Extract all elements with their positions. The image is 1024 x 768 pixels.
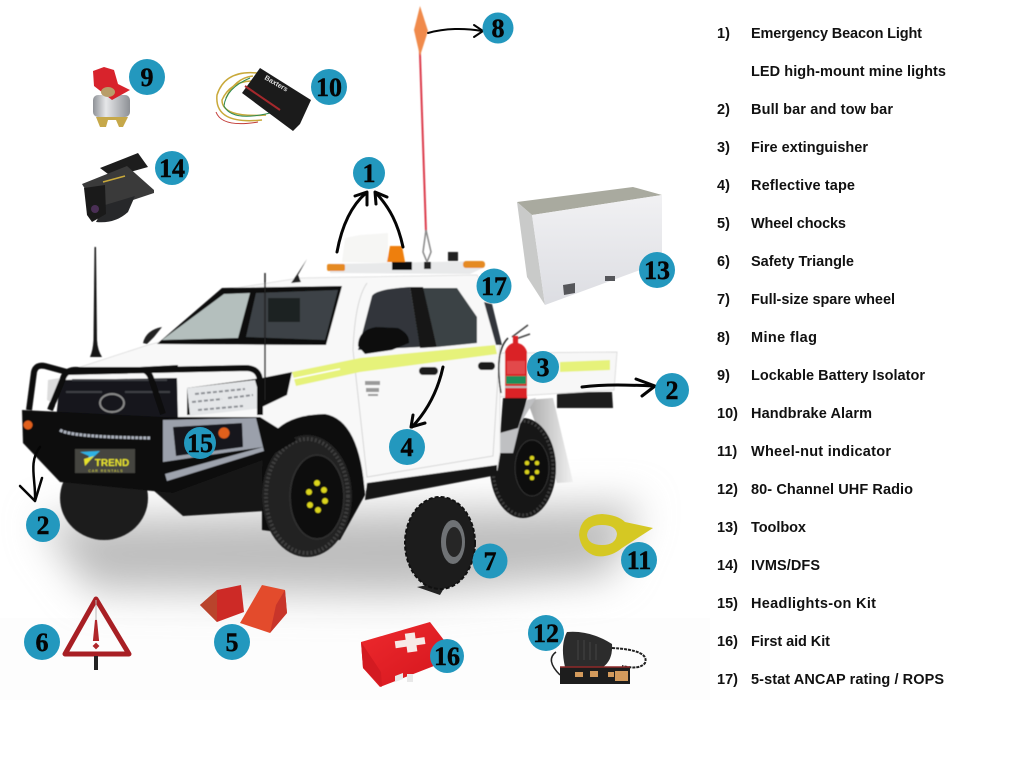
badge 13 [639,252,675,288]
equipment legend list: 2) [717,102,730,118]
light pod [173,423,243,456]
badge 14: 14 [159,154,185,183]
badge 9: 9 [140,63,154,92]
badge 8: 8 [492,14,504,43]
equipment legend list: 11) [717,444,737,460]
equipment legend list: Emergency Beacon Light [751,26,922,42]
equipment legend list: 6) [717,254,730,270]
badge 8 [482,12,514,44]
equipment legend list: 8) [717,330,730,346]
equipment legend list: Safety Triangle [751,254,854,270]
bull bar tubes [29,366,260,415]
equipment legend list: 5) [717,216,730,232]
equipment legend list: Toolbox [751,520,806,536]
grille [47,378,178,420]
equipment legend list: 80- Channel UHF Radio [751,482,913,498]
badge 6 [24,624,60,660]
underbody [130,450,280,516]
equipment legend list: Wheel-nut indicator [751,444,891,460]
badge 5: 5 [226,628,238,657]
equipment legend list: 17) [717,672,738,688]
equipment legend list: First aid Kit [751,634,830,650]
equipment legend list: 12) [717,482,738,498]
equipment legend list: Bull bar and tow bar [751,102,893,118]
front wheel [262,435,352,557]
badge 2, rear: 2 [666,376,678,405]
badge 1: 1 [362,159,376,188]
first aid kit [361,622,457,687]
hood aerial [90,247,102,357]
badge 17: 17 [481,272,507,301]
equipment legend list: 10) [717,406,738,422]
vehicle: white ute with bull bar [22,6,617,557]
arrow to 1, right [375,192,403,247]
equipment legend list: 15) [717,596,738,612]
equipment legend list: LED high-mount mine lights [751,64,946,80]
badge 11 [621,542,657,578]
arrow to 2, front [20,447,42,501]
rear cab glass [484,302,502,345]
door seams [353,283,500,477]
toolbox [517,187,662,305]
equipment legend list: Wheel chocks [751,216,846,232]
side sticker [365,381,380,396]
equipment legend list: 14) [717,558,738,574]
roof rack [330,261,483,274]
bumper [22,410,297,493]
rear fender [495,398,536,453]
IVMS dash camera [82,153,154,222]
badge 2, rear [655,373,689,407]
equipment legend list: IVMS/DFS [751,558,820,574]
badge 16: 16 [434,642,460,671]
handbrake alarm: Baxters [263,75,289,94]
badge 10 [311,69,347,105]
windscreen [157,286,342,345]
badge 11: 11 [627,546,651,575]
UHF radio [551,632,646,684]
equipment legend list: 9) [717,368,730,384]
wheel chocks [200,585,287,633]
badge 3 [527,351,559,383]
logo plate [75,449,135,473]
equipment legend list: 7) [717,292,730,308]
equipment legend list: Headlights-on Kit [751,596,876,612]
equipment legend list: 16) [717,634,738,650]
badge 2, front: 2 [36,511,50,540]
badge 15: 15 [187,429,213,458]
door handles [419,362,495,375]
equipment legend list: 4) [717,178,730,194]
handbrake alarm [216,68,311,131]
equipment legend list: Fire extinguisher [751,140,868,156]
arrow to 1, left [337,192,367,252]
bumper silver panel [163,418,263,462]
badge 16 [430,639,464,673]
badge 4: 4 [400,433,414,462]
badge 6: 6 [36,628,48,657]
wheel arch [262,414,365,540]
badge 7 [472,544,508,578]
badge 1 [353,157,385,189]
headlight [187,372,292,416]
fascia aerial [264,273,266,400]
badge 3: 3 [536,353,550,382]
side step [365,465,497,500]
rear door window [423,288,477,347]
roof aerial [291,259,307,283]
left mirror [143,327,162,344]
equipment legend list: 5-stat ANCAP rating / ROPS [751,672,944,688]
badge 2, front [26,508,60,542]
badge 9 [129,59,165,95]
equipment legend list: Reflective tape [751,178,855,194]
badge 5 [214,624,250,660]
amber marker lights [327,261,485,271]
equipment legend list: 13) [717,520,738,536]
LED light bar [60,430,150,438]
equipment legend list: 1) [717,26,730,42]
arrow to 8 [428,25,483,37]
wing mirror on door [358,327,409,354]
wheel-nut indicator [579,514,653,556]
badge 4 [389,429,425,465]
front door window [358,287,420,350]
rear tray [500,352,617,483]
spare wheel [405,497,475,595]
equipment legend list: Full-size spare wheel [751,292,895,308]
body shell [60,275,500,490]
mine flag [414,6,428,56]
reflective tape on cab [292,345,497,386]
badge 10: 10 [316,73,342,102]
front-left tyre [60,456,148,540]
logo plate: CAR RENTALS [88,469,124,473]
badge 7: 7 [484,547,496,576]
equipment legend list: Lockable Battery Isolator [751,368,925,384]
battery isolator [93,67,130,127]
arrow to 2, rear [582,379,655,396]
badge 12 [528,615,564,651]
equipment legend list [717,26,946,688]
door pillar [410,287,437,348]
rear wheel [490,418,556,518]
emergency beacon [387,246,412,270]
badge 14 [155,151,189,185]
badge 13: 13 [644,256,670,285]
equipment legend list: Mine flag [751,330,817,346]
equipment legend list: 3) [717,140,730,156]
warning triangle [65,599,129,670]
orange indicators [24,420,230,438]
ground shadow [40,505,640,595]
arrow to 4 [411,367,443,427]
fire extinguisher [499,325,530,398]
equipment legend list: Handbrake Alarm [751,406,872,422]
flag mast [419,25,458,269]
logo plate: TREND [95,458,129,469]
badge 17 [476,268,512,304]
badge 12: 12 [533,619,559,648]
roof load: white case [342,233,388,263]
